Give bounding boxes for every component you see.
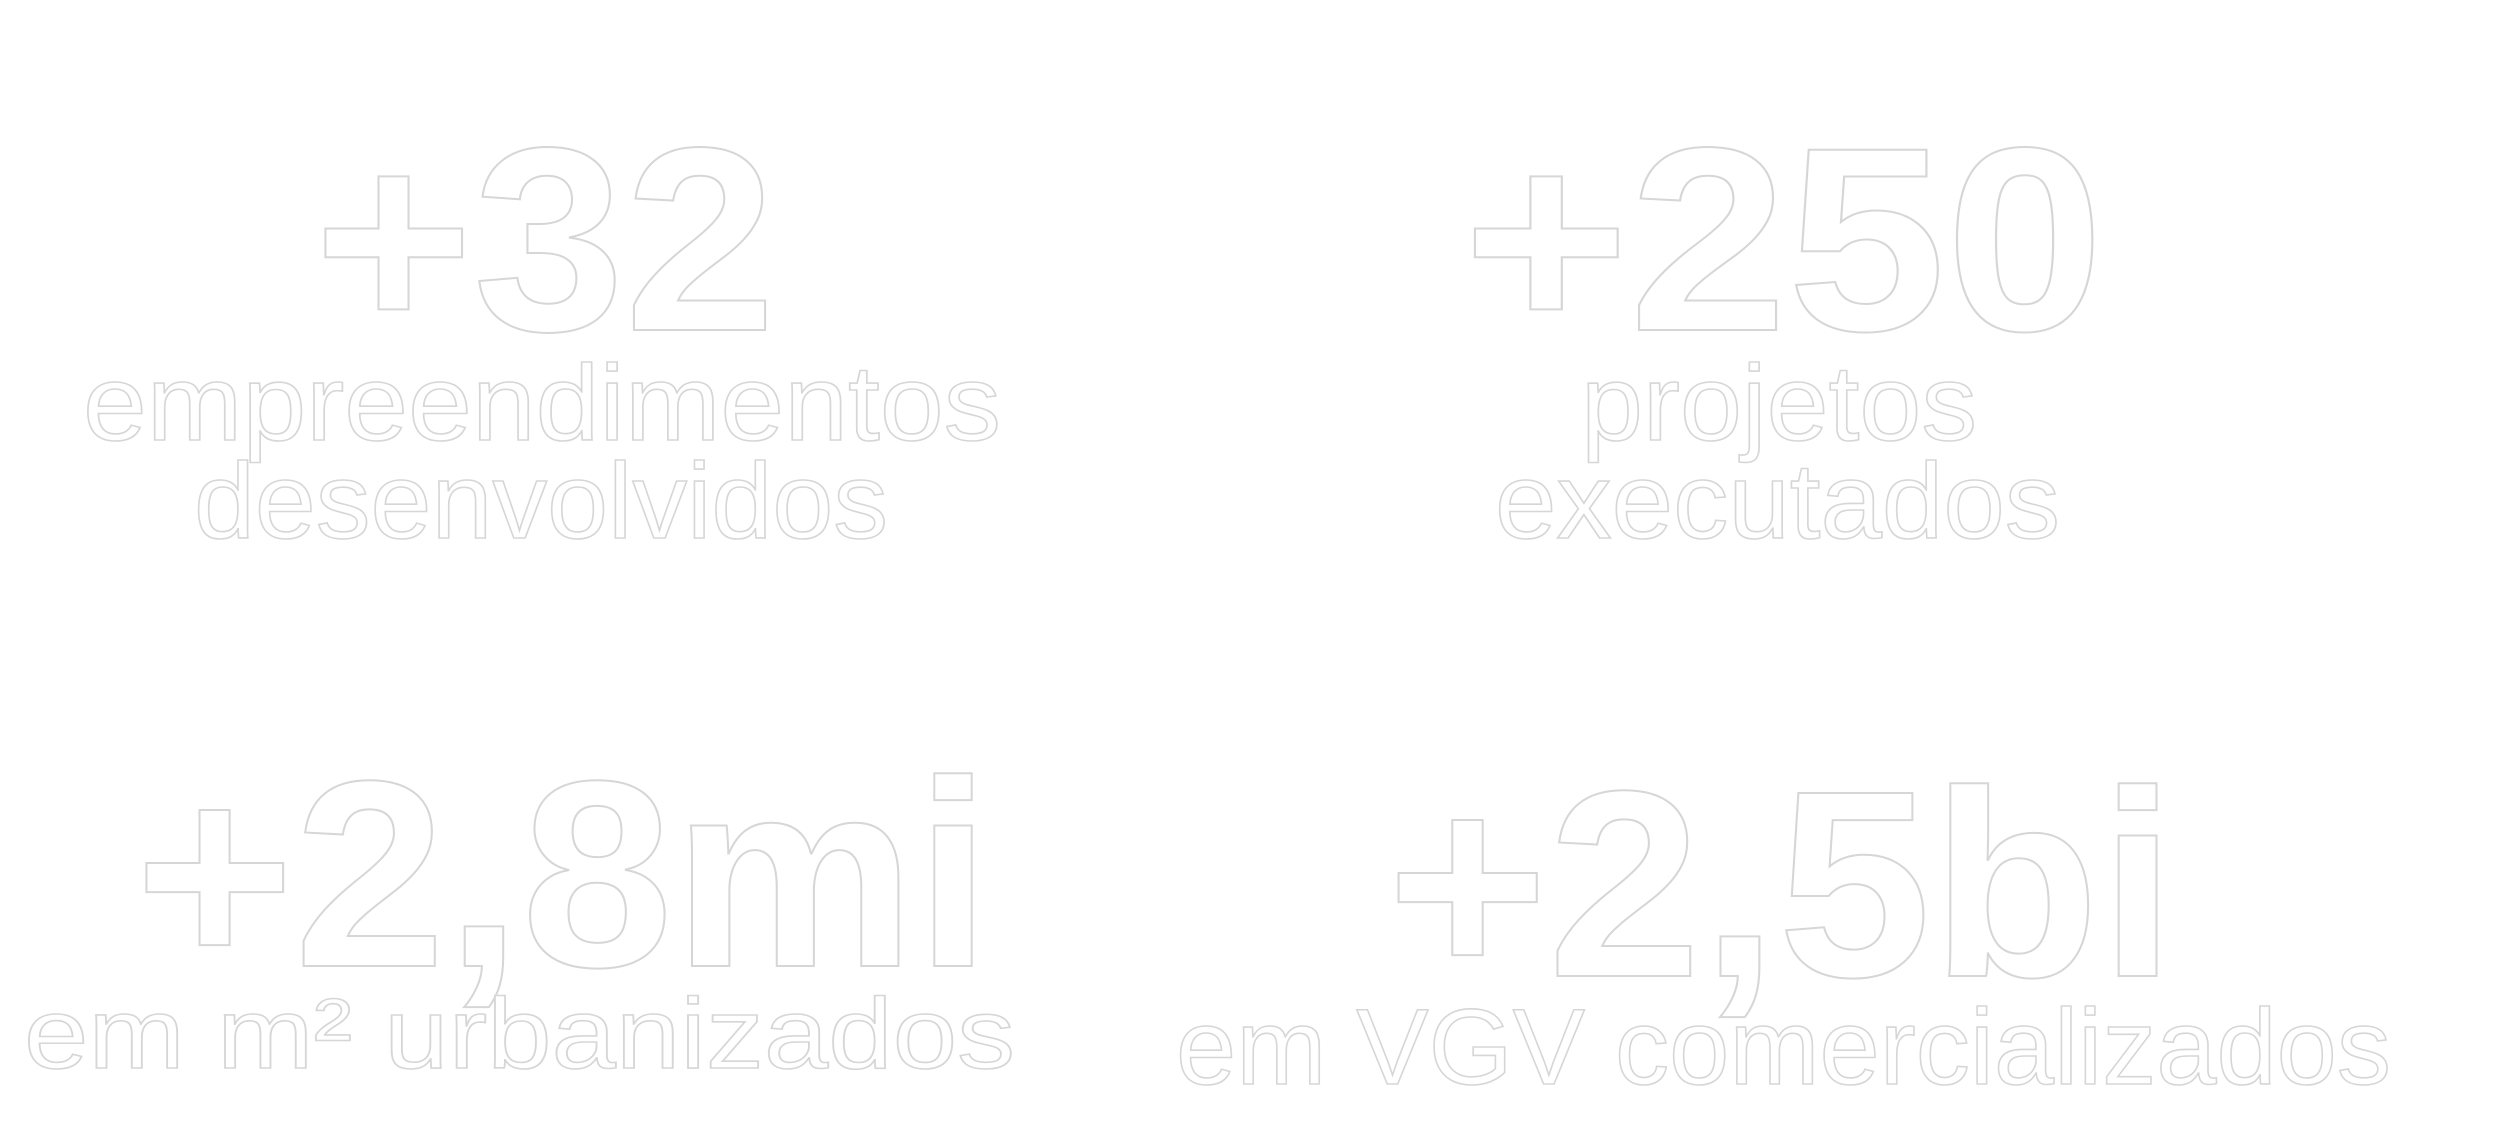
label: projetos executados: executados <box>1495 440 2060 561</box>
label: projetos executados: projetos <box>1581 342 1977 463</box>
stat: +2,5bi <box>1176 736 2391 1107</box>
number: +32: +32 <box>314 93 776 386</box>
label: empreendimentos desenvolvidos: desenvolvidos <box>194 440 888 561</box>
stat: +2,8mi <box>24 726 1015 1090</box>
stat: +250 projetos <box>1463 93 2104 561</box>
label: empreendimentos desenvolvidos <box>83 342 1001 561</box>
number: +2,5bi: +2,5bi <box>1387 736 2176 1033</box>
number: +250: +250 <box>1463 93 2104 386</box>
label: em VGV comercializados: em VGV comercializados <box>1176 986 2391 1107</box>
number: +2,8mi: +2,8mi <box>135 726 991 1023</box>
label: em m² urbanizados: em m² urbanizados <box>24 978 1015 1090</box>
label: empreendimentos desenvolvidos: empreendimentos <box>83 342 1001 463</box>
label: projetos executados <box>1495 342 2060 561</box>
stat: +32 empreendimentos <box>83 93 1001 561</box>
